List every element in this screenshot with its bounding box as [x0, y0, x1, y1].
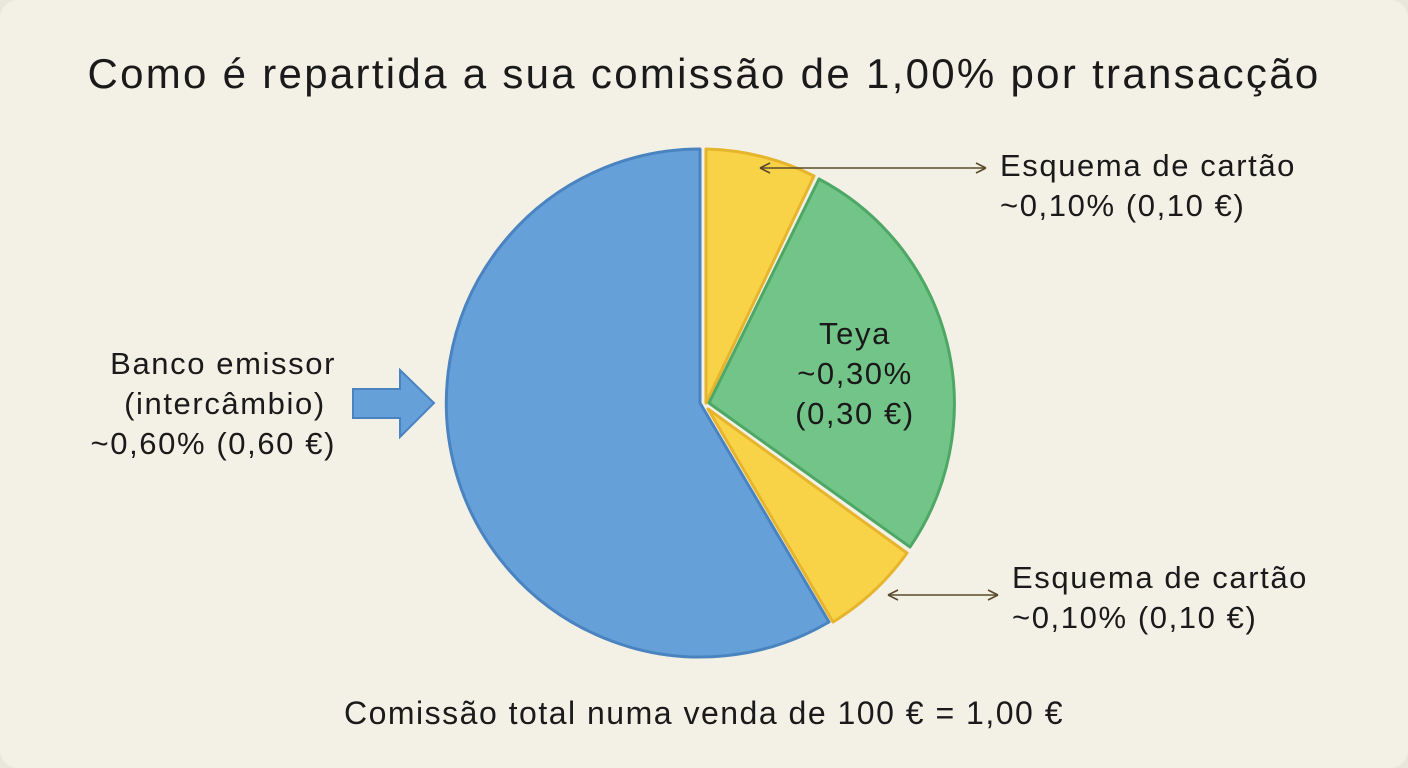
label: teya: [795, 316, 915, 431]
label: esquema bottom: Esquema de cartão: [1012, 560, 1308, 595]
arrow: bottom label: [888, 590, 998, 600]
label: banco emissor: ~0,60% (0,60 €): [91, 426, 336, 461]
label: esquema top: Esquema de cartão: [1000, 148, 1296, 183]
icon: blue block arrow: [353, 370, 434, 437]
label: teya: ~0,30%: [797, 356, 913, 391]
label: teya: (0,30 €): [795, 396, 915, 431]
label: banco emissor: [91, 346, 336, 461]
label: esquema bottom: ~0,10% (0,10 €): [1012, 600, 1257, 635]
arrow: top label: [760, 163, 986, 173]
label: teya: Teya: [819, 316, 891, 351]
slice: esquema top: [706, 149, 814, 403]
label: esquema bottom: [1012, 560, 1308, 635]
label: banco emissor: (intercâmbio): [124, 386, 326, 421]
label: banco emissor: Banco emissor: [110, 346, 336, 381]
slice: esquema bottom: [708, 409, 907, 622]
label: esquema top: [1000, 148, 1296, 223]
slice: teya: [709, 179, 954, 547]
title: Como é repartida a sua comissão de 1,00% por transacção: [87, 50, 1321, 97]
footer total: Comissão total numa venda de 100 € = 1,00 €: [344, 695, 1064, 731]
slice: banco emissor: [446, 149, 829, 657]
label: esquema top: ~0,10% (0,10 €): [1000, 188, 1245, 223]
